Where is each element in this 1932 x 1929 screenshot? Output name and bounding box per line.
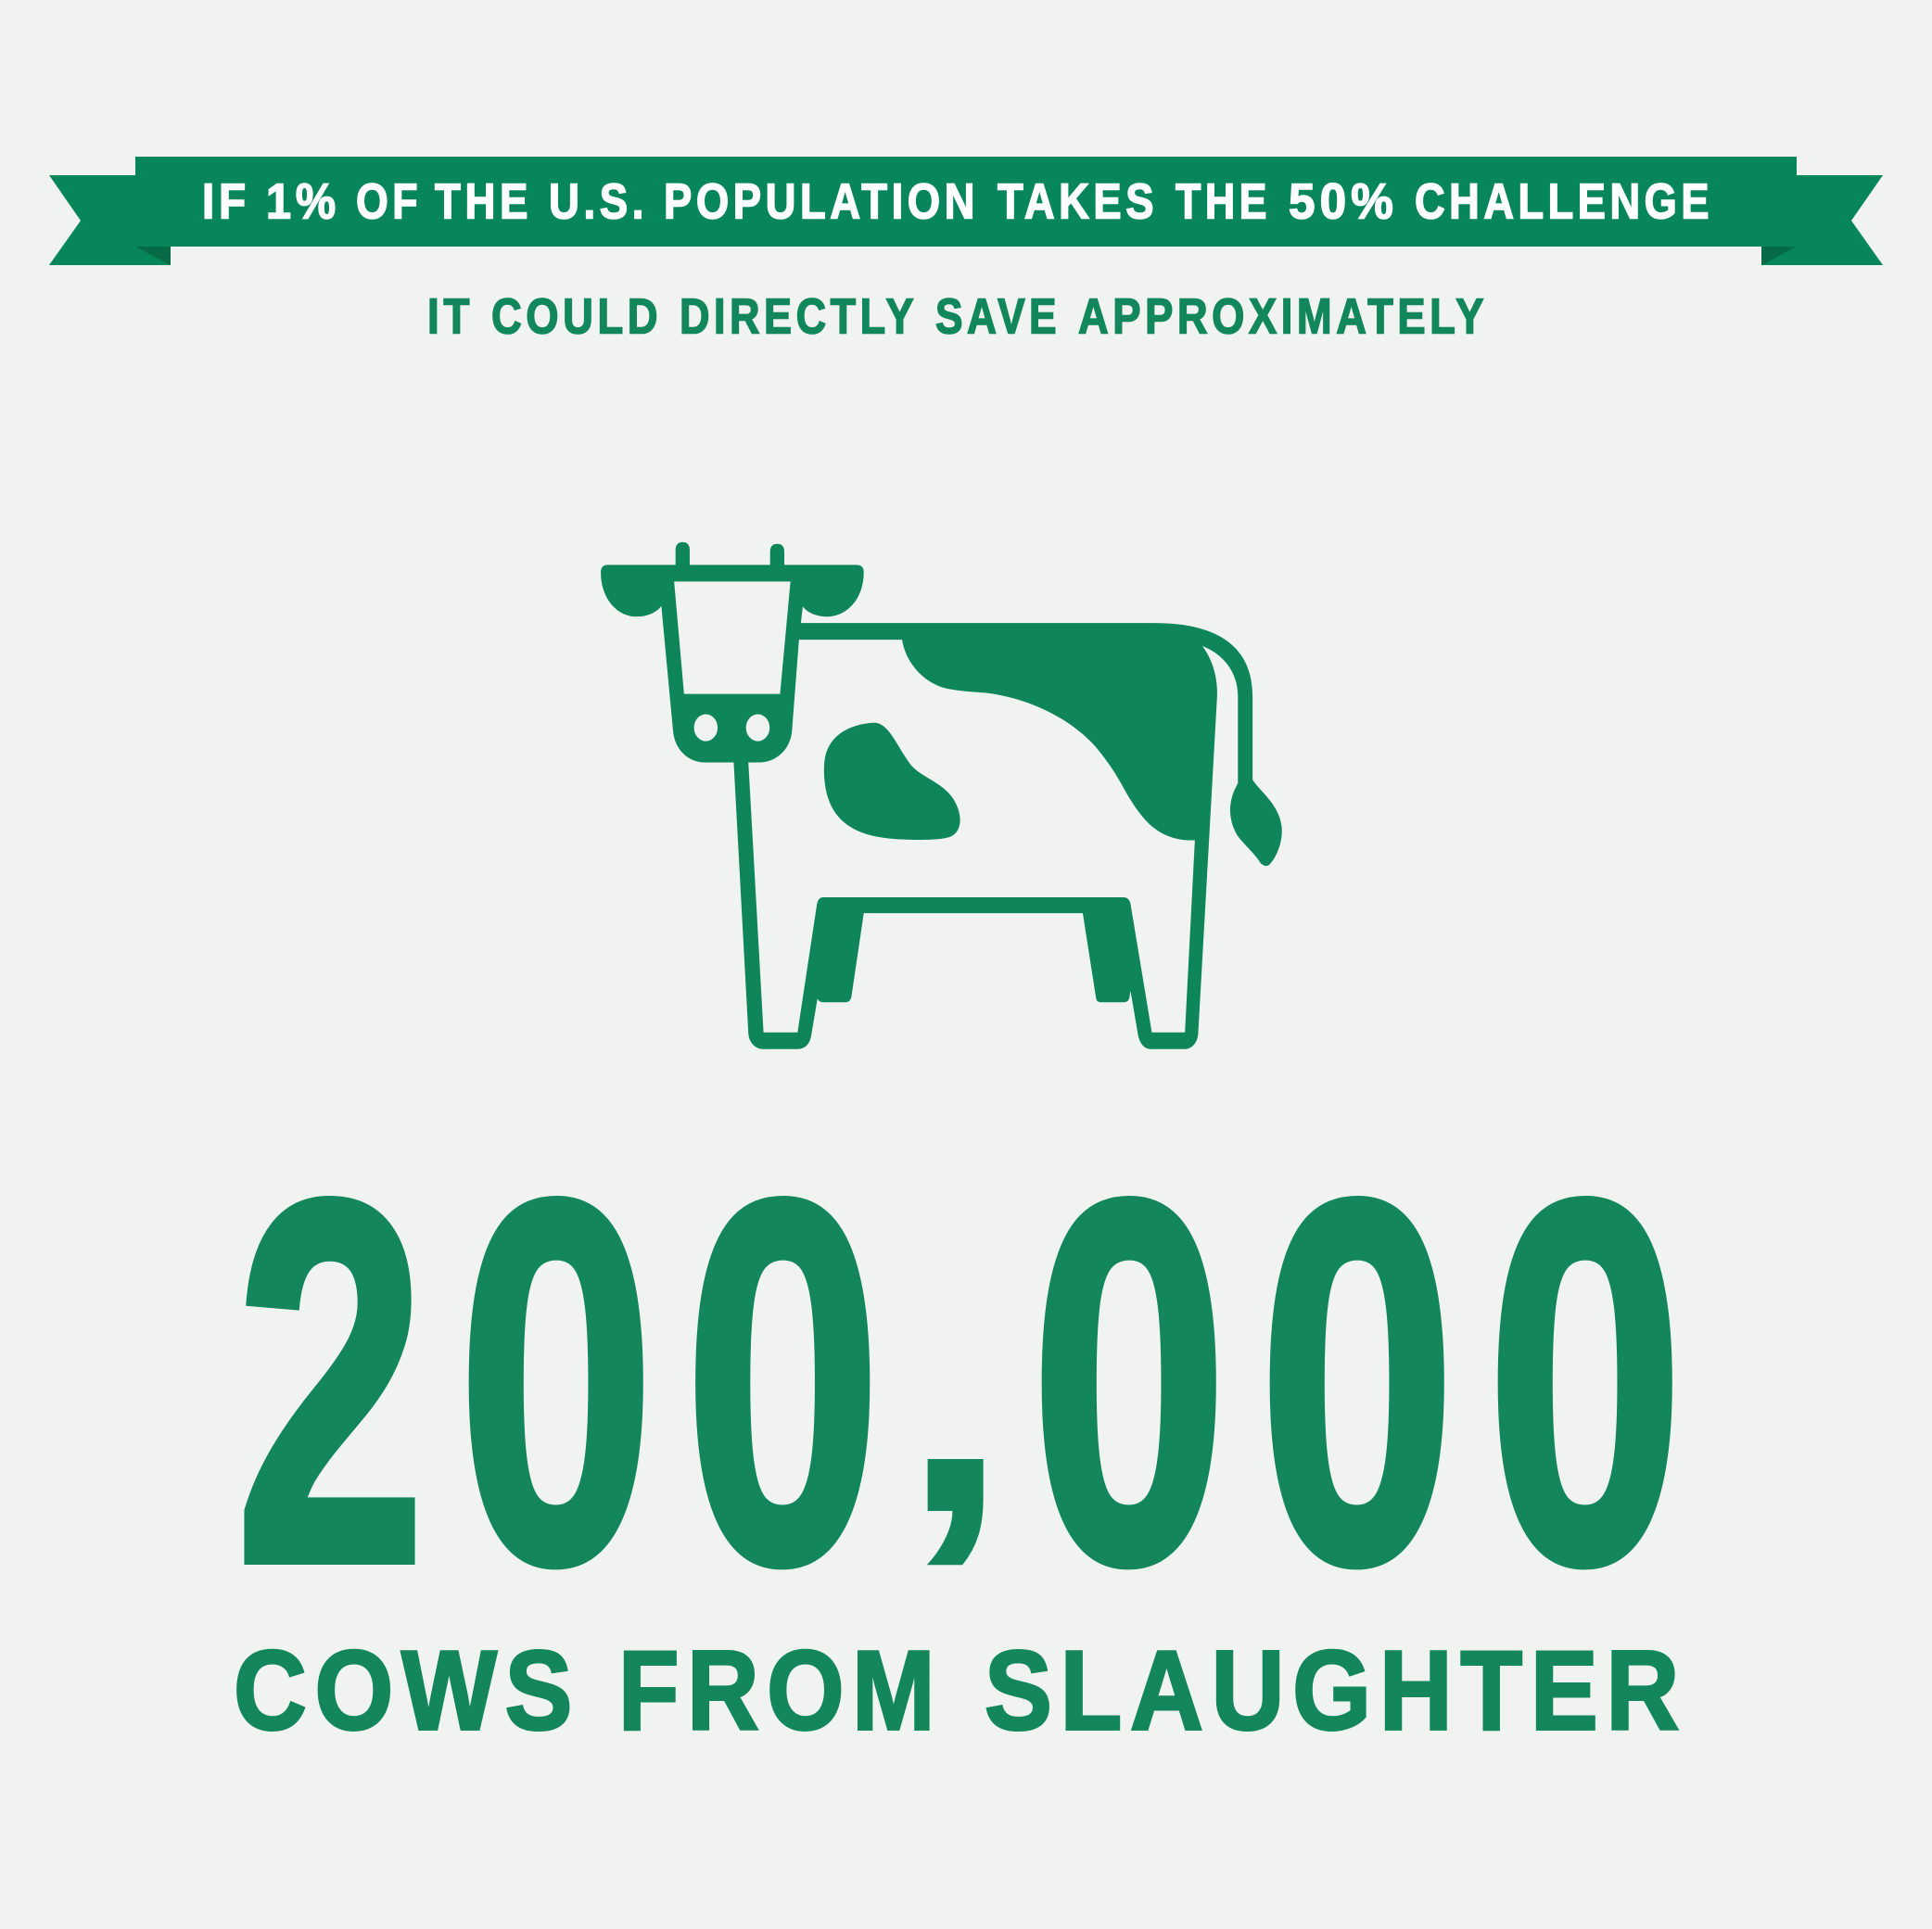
big number: 200,000: 0: [458, 1094, 655, 1669]
caption: cows from slaughter: SLAUGHTER: [985, 1628, 1687, 1754]
caption: cows from slaughter: [234, 1628, 1687, 1754]
heading: 1% challenge: THE: [1176, 174, 1271, 230]
subheading: it could directly save approximately: APPROXIMATELY: [1078, 289, 1488, 345]
subheading: it could directly save approximately: IT: [427, 289, 474, 345]
big number: 200,000: 2: [235, 1094, 426, 1669]
heading: 1% challenge: 1%: [266, 174, 340, 230]
caption: cows from slaughter: COWS: [234, 1628, 580, 1754]
heading: 1% challenge: TAKES: [998, 174, 1158, 230]
cow side spot: [824, 723, 960, 840]
heading: 1% challenge: OF: [356, 174, 422, 230]
subheading: it could directly save approximately: DIRECTLY: [680, 289, 918, 345]
cow outline with head, ears, body patch and tail: [601, 542, 1282, 1049]
caption: cows from slaughter: FROM: [618, 1628, 943, 1754]
heading: 1% challenge: IF: [202, 174, 250, 230]
heading: 1% challenge: 50%: [1289, 174, 1398, 230]
heading: 1% challenge: THE: [435, 174, 532, 230]
subheading: it could directly save approximately: COULD: [491, 289, 662, 345]
subheading: it could directly save approximately: SAVE: [935, 289, 1061, 345]
big number: 200,000: 0: [684, 1094, 881, 1669]
subheading: it could directly save approximately: [427, 289, 1488, 345]
heading: 1% challenge: U.S.: [549, 174, 648, 230]
icon: cow: [601, 542, 1282, 1049]
heading: 1% challenge: POPULATION: [664, 174, 979, 230]
heading: 1% challenge: [202, 174, 1713, 230]
big number: 200,000: ,: [900, 1196, 1010, 1585]
ribbon banner: [49, 157, 1883, 265]
heading: 1% challenge: CHALLENGE: [1415, 174, 1713, 230]
